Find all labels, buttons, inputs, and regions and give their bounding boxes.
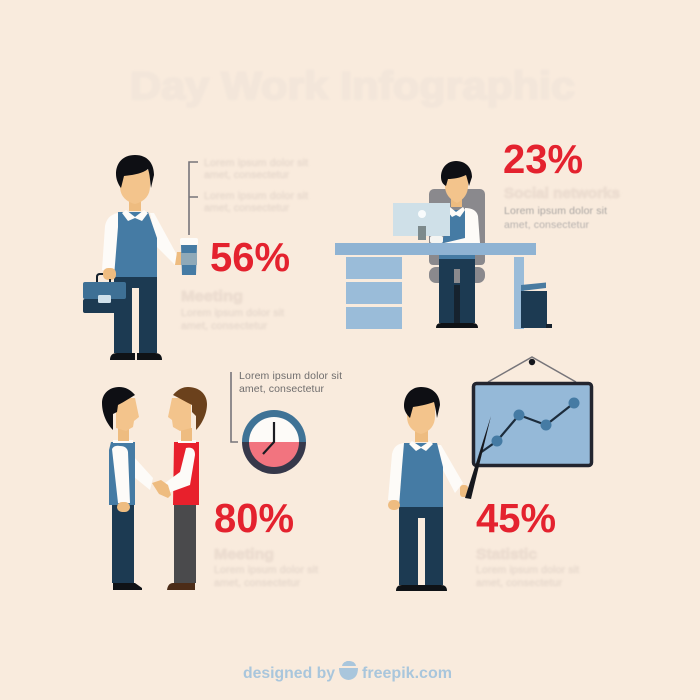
faded label: meeting: Lorem ipsum dolor sit	[214, 564, 318, 576]
icon: clock	[242, 410, 306, 474]
credit text left: designed by	[243, 665, 335, 682]
faded label: meeting: amet, consectetur	[214, 577, 300, 589]
icon: coffee cup	[180, 238, 198, 275]
note text: amet, consectetur	[239, 383, 324, 395]
figure: man in blue vest	[102, 387, 153, 590]
note text: Lorem ipsum dolor sit	[239, 370, 342, 382]
stat: 56%: 56%	[210, 234, 290, 280]
faded note text	[204, 157, 308, 214]
office chair	[429, 189, 485, 283]
faded label: social networks: Social networks	[504, 185, 620, 202]
faded label: meeting: Meeting	[214, 546, 274, 563]
faded note text: amet, consectetur	[204, 202, 290, 214]
icon: briefcase	[83, 274, 126, 313]
note text	[239, 370, 342, 395]
note line	[231, 372, 238, 442]
faded note text: Lorem ipsum dolor sit	[204, 157, 308, 169]
faded label: meeting: Meeting	[181, 288, 243, 305]
panel: presenter	[388, 357, 592, 591]
panel: desk worker	[335, 136, 620, 329]
faded label: statistic: amet, consectetur	[476, 577, 562, 589]
pointer stick	[465, 416, 491, 499]
footer credit	[243, 661, 452, 682]
figure: presenting man	[388, 387, 468, 591]
faded note text: amet, consectetur	[204, 169, 290, 181]
chart board	[474, 357, 592, 466]
credit text right: freepik.com	[362, 665, 452, 682]
desk	[335, 243, 536, 329]
faded label: meeting: amet, consectetur	[181, 320, 268, 332]
title: Day Work Infographic	[130, 65, 575, 108]
faded label: statistic: Statistic	[476, 546, 537, 563]
faded label: statistic: Lorem ipsum dolor sit	[476, 564, 579, 576]
panel: commuting person	[83, 155, 308, 360]
description text	[504, 205, 607, 231]
bracket line	[189, 162, 198, 235]
panel: handshake	[102, 370, 342, 590]
faded label: meeting: Lorem ipsum dolor sit	[181, 307, 284, 319]
stat: 23%: 23%	[503, 136, 583, 182]
faded note text: Lorem ipsum dolor sit	[204, 190, 308, 202]
stat: 45%: 45%	[476, 495, 556, 541]
faded label: meeting	[214, 546, 318, 589]
computer monitor	[393, 203, 450, 243]
figure: seated man	[436, 161, 480, 328]
waste bin	[521, 282, 552, 328]
description text: amet, consectetur	[504, 219, 590, 231]
stat: 80%: 80%	[214, 495, 294, 541]
faded label: meeting	[181, 288, 284, 332]
icon: freepik mascot	[339, 661, 358, 680]
description text: Lorem ipsum dolor sit	[504, 205, 607, 217]
figure: man in red vest	[152, 387, 207, 590]
faded label: statistic	[476, 546, 579, 589]
figure: man with briefcase	[102, 155, 182, 360]
